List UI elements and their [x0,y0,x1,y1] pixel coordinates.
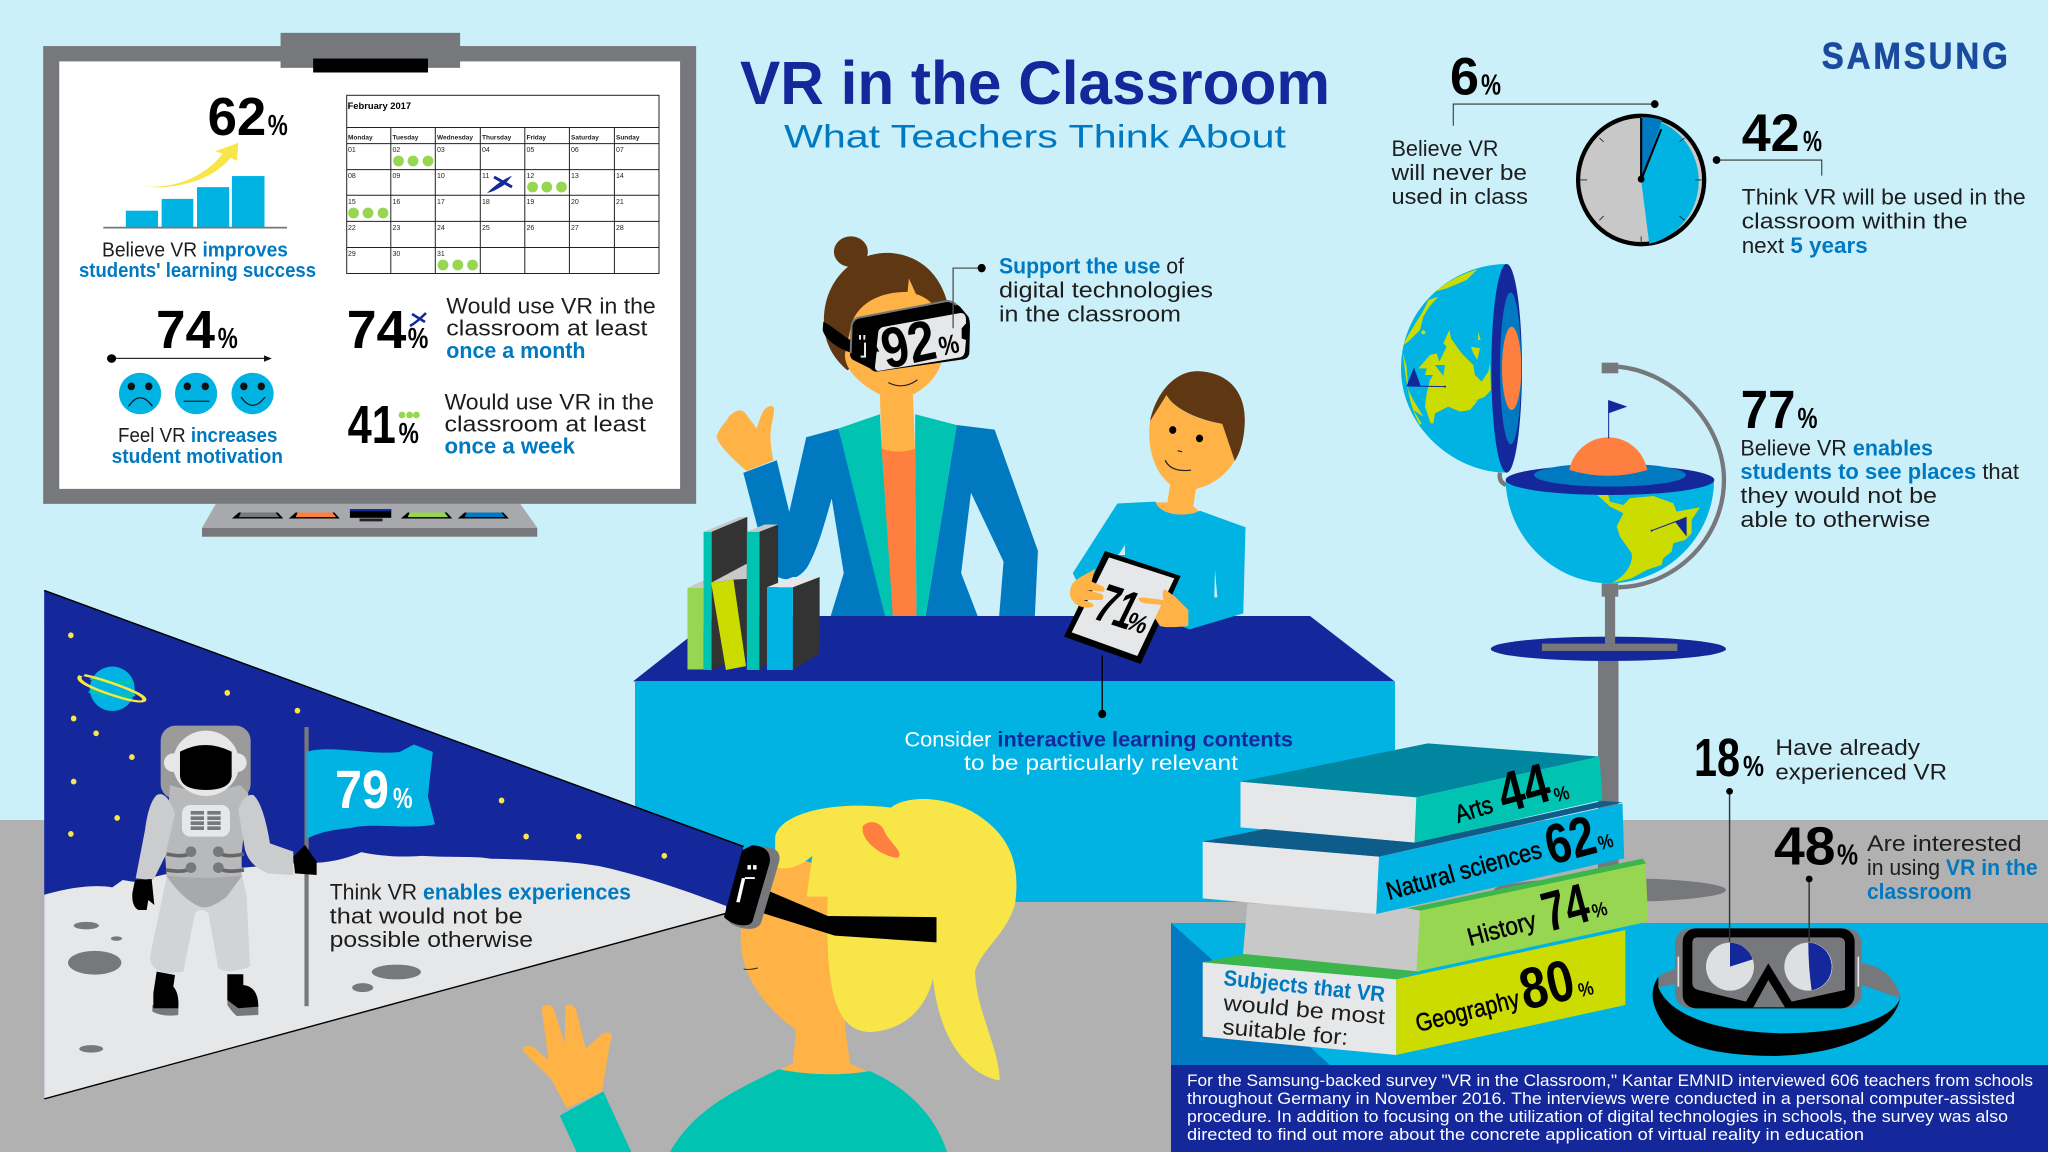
survey note [1187,1071,2033,1144]
stat: 48% interested: classroom [1867,879,1972,904]
flag [304,727,435,1006]
calendar: February 2017: 05 [526,147,534,154]
stat: 6% never [1390,48,1528,209]
book labels [1221,751,1616,1050]
stat: 74% increases motivation: % [218,323,238,355]
stat: 62% improves learning [79,87,316,282]
stat: 48% interested: % [1837,839,1858,871]
stat: 62% improves learning: % [268,110,288,142]
book: geography [1203,930,1625,1055]
calendar: February 2017: 20 [571,199,579,206]
stat: 62% improves learning: students' learning success [79,260,316,282]
stat: 74% once a month: once a month [446,338,586,363]
calendar: February 2017: 23 [392,225,400,232]
book labels: 74 [1535,871,1596,944]
stat: 6% never: 6 [1450,48,1479,106]
calendar: February 2017: 31 [437,251,445,258]
stat: 41% once a week [348,390,654,458]
teacher figure [717,236,1038,617]
stack of subject books [1203,743,1648,1055]
book labels: 80 [1513,947,1581,1023]
calendar: February 2017: 25 [482,225,490,232]
text: 92% support: % [936,328,962,362]
calendar: February 2017: Sunday [616,134,640,141]
calendar: February 2017: 17 [437,199,445,206]
book labels: % [1590,899,1610,923]
text: 71% interactive content: Consider interactive learning contents [904,728,1293,752]
stat: 6% never: used in class [1392,184,1528,209]
VR view: moon scene: possible otherwise [330,927,533,952]
book labels: % [1576,978,1596,1002]
VR headset on teacher [823,301,970,372]
stat: 74% increases motivation: student motivation [112,446,283,468]
upper hemisphere [1401,264,1522,473]
stat: 48% interested: Are interested [1867,831,2022,856]
calendar: February 2017: 22 [348,225,356,232]
calendar: February 2017: 13 [571,173,579,180]
calendar: February 2017: 01 [348,147,356,154]
calendar: February 2017: Saturday [571,134,599,141]
stat: 77% see places: students to see places that [1740,459,2020,484]
calendar: February 2017: 21 [616,199,624,206]
lower hemisphere [1506,400,1714,583]
book labels: 44 [1491,751,1556,825]
calendar: February 2017: 02 [392,147,400,154]
calendar: February 2017: 26 [526,225,534,232]
stat: 74% once a month: Would use VR in the [446,294,656,318]
stat: 77% see places: able to otherwise [1740,507,1930,532]
calendar: February 2017: 27 [571,225,579,232]
calendar: February 2017: 24 [437,225,445,232]
stat: 48% interested: 48 [1774,816,1836,876]
subtitle: What Teachers Think About [784,118,1286,154]
calendar: February 2017: Thursday [482,134,512,141]
stat: 42% within 5 years: % [1803,126,1822,158]
planet [79,667,144,711]
moon rocks [68,922,421,1053]
calendar: February 2017: 15 [348,199,356,206]
stat: 62% improves learning: 62 [208,87,266,147]
calendar: February 2017: 07 [616,147,624,154]
stat: 18% experienced: Have already [1775,735,1921,760]
stat: 77% see places: Believe VR enables [1740,435,1933,460]
stars [68,632,667,859]
logo: Samsung: SAMSUNG [1822,36,2008,77]
tablet [1064,545,1217,664]
calendar: February 2017: 28 [616,225,624,232]
book labels: suitable for: [1222,1014,1349,1050]
stat: 41% once a week: 41 [348,395,396,455]
calendar: February 2017: 03 [437,147,445,154]
floor shadow [1494,878,1726,902]
motivation scale with three faces [107,354,274,414]
calendar: February 2017: 09 [392,173,400,180]
book labels: would be most [1221,990,1386,1029]
book labels: Natural sciences [1383,836,1545,906]
books on desk [687,517,820,670]
book labels: Arts [1452,791,1496,829]
VR view: moon scene: that would not be [330,903,523,928]
text: 92% support: digital technologies [999,278,1213,303]
book labels: % [1552,783,1572,807]
stat: 42% within 5 years: Think VR will be used in the [1742,185,2026,210]
stat: 18% experienced [1694,728,1947,788]
calendar: February 2017: 04 [482,147,490,154]
survey note: For the Samsung-backed survey "VR in the Classroom," Kantar EMNID interviewed 606 teachers from schools [1187,1071,2033,1090]
stat: 18% experienced: 18 [1694,728,1740,788]
stat: 6% never: Believe VR [1392,136,1498,161]
globe with stand [1401,264,1726,880]
calendar: February 2017: 06 [571,147,579,154]
stat: 18% experienced: experienced VR [1775,759,1947,784]
title [740,49,1330,154]
survey note: procedure. In addition to focusing on the utilization of digital technologies in schools, the survey was also [1187,1107,2008,1126]
calendar: February 2017 [347,95,659,274]
calendar: February 2017: 16 [392,199,400,206]
stat: 6% never: % [1481,70,1501,102]
clock: 6% and 42% [1390,48,2026,258]
stat: 62% improves learning: Believe VR improves [102,239,288,261]
calendar: February 2017: Wednesday [437,134,473,141]
stat: 74% once a month: % [408,323,429,355]
stat: 77% see places: they would not be [1740,483,1937,508]
text: 71% interactive content: % [1121,606,1154,640]
stat: 42% within 5 years: 42 [1742,104,1800,163]
VR view: moon scene: Think VR enables experiences [330,880,631,905]
stat: 42% within 5 years [1742,104,2026,258]
pointer lines to headset [1726,788,1813,942]
stat: 74% once a month: 74 [347,300,406,360]
calendar: February 2017: February 2017 [348,101,411,112]
calendar: February 2017: 11 [482,173,489,180]
calendar: February 2017: Monday [348,134,373,141]
book: history [1243,859,1648,972]
survey note: throughout Germany in November 2016. The interviews were conducted in a personal computer-assisted [1187,1089,2015,1108]
stat: 48% interested: in using VR in the [1867,855,2038,880]
text: 71% interactive content [904,573,1293,775]
title: VR in the Classroom [740,49,1330,117]
bar chart with rising arrow [103,143,287,229]
number on tablet: 71 [1086,573,1149,641]
VR view: moon scene: % [393,783,413,815]
calendar: February 2017: Friday [526,134,546,141]
book labels: History [1464,907,1540,952]
text: 92% support [875,254,1213,382]
calendar: February 2017: 12 [526,173,534,180]
book: natural sciences [1203,801,1624,914]
stat: 41% once a week: Would use VR in the [444,390,654,415]
book labels: % [1596,831,1616,855]
connector: headset to label [953,264,986,328]
stat: 41% once a week: % [399,418,419,450]
calendar: February 2017: 08 [348,173,356,180]
stat: 74% once a month: classroom at least [446,316,648,341]
VR view: moon scene [44,590,744,1099]
calendar: February 2017: 19 [526,199,534,206]
stat: 74% increases motivation: Feel VR increases [118,425,277,447]
number on headset: 92 [875,308,942,382]
astronaut [132,726,317,1016]
calendar: February 2017: 18 [482,199,490,206]
stat: 41% once a week: once a week [444,434,575,458]
calendar: February 2017: 29 [348,251,356,258]
text: 71% interactive content: to be particularly relevant [964,751,1238,775]
calendar: February 2017: 30 [392,251,400,258]
book: arts [1240,743,1602,843]
calendar: February 2017: Tuesday [392,134,419,141]
calendar: February 2017: 14 [616,173,624,180]
student with tablet [1064,371,1246,718]
stat: 74% increases motivation [107,300,283,468]
text: 92% support: Support the use of [999,254,1185,278]
number on flag: 79 [335,760,389,820]
stat: 6% never: will never be [1390,160,1527,185]
calendar: February 2017: 10 [437,173,445,180]
blue floor and footer panel [1171,923,2048,1152]
book labels: Geography [1413,985,1523,1038]
text: 92% support: in the classroom [999,302,1181,327]
stat: 77% see places [1740,380,2020,532]
stat: 42% within 5 years: classroom within the [1742,209,1968,234]
student with blonde hair wearing headset [523,799,1016,1152]
stat: 41% once a week: classroom at least [444,412,647,437]
book labels: Subjects that VR [1222,965,1386,1007]
desk [633,616,1395,902]
stat: 74% increases motivation: 74 [156,300,215,360]
stat: 18% experienced: % [1743,751,1764,783]
survey note: directed to find out more about the concrete application of virtual reality in education [1187,1125,1864,1144]
stat: 48% interested [1774,816,2038,904]
stat: 77% see places: 77 [1741,380,1795,440]
stat: 77% see places: % [1798,403,1818,435]
panel: whiteboard [43,33,696,537]
stat: 74% once a month [347,294,656,363]
book labels: 62 [1538,803,1602,877]
stat: 42% within 5 years: next 5 years [1742,233,1868,258]
VR headset with pie charts [1653,928,1901,1056]
